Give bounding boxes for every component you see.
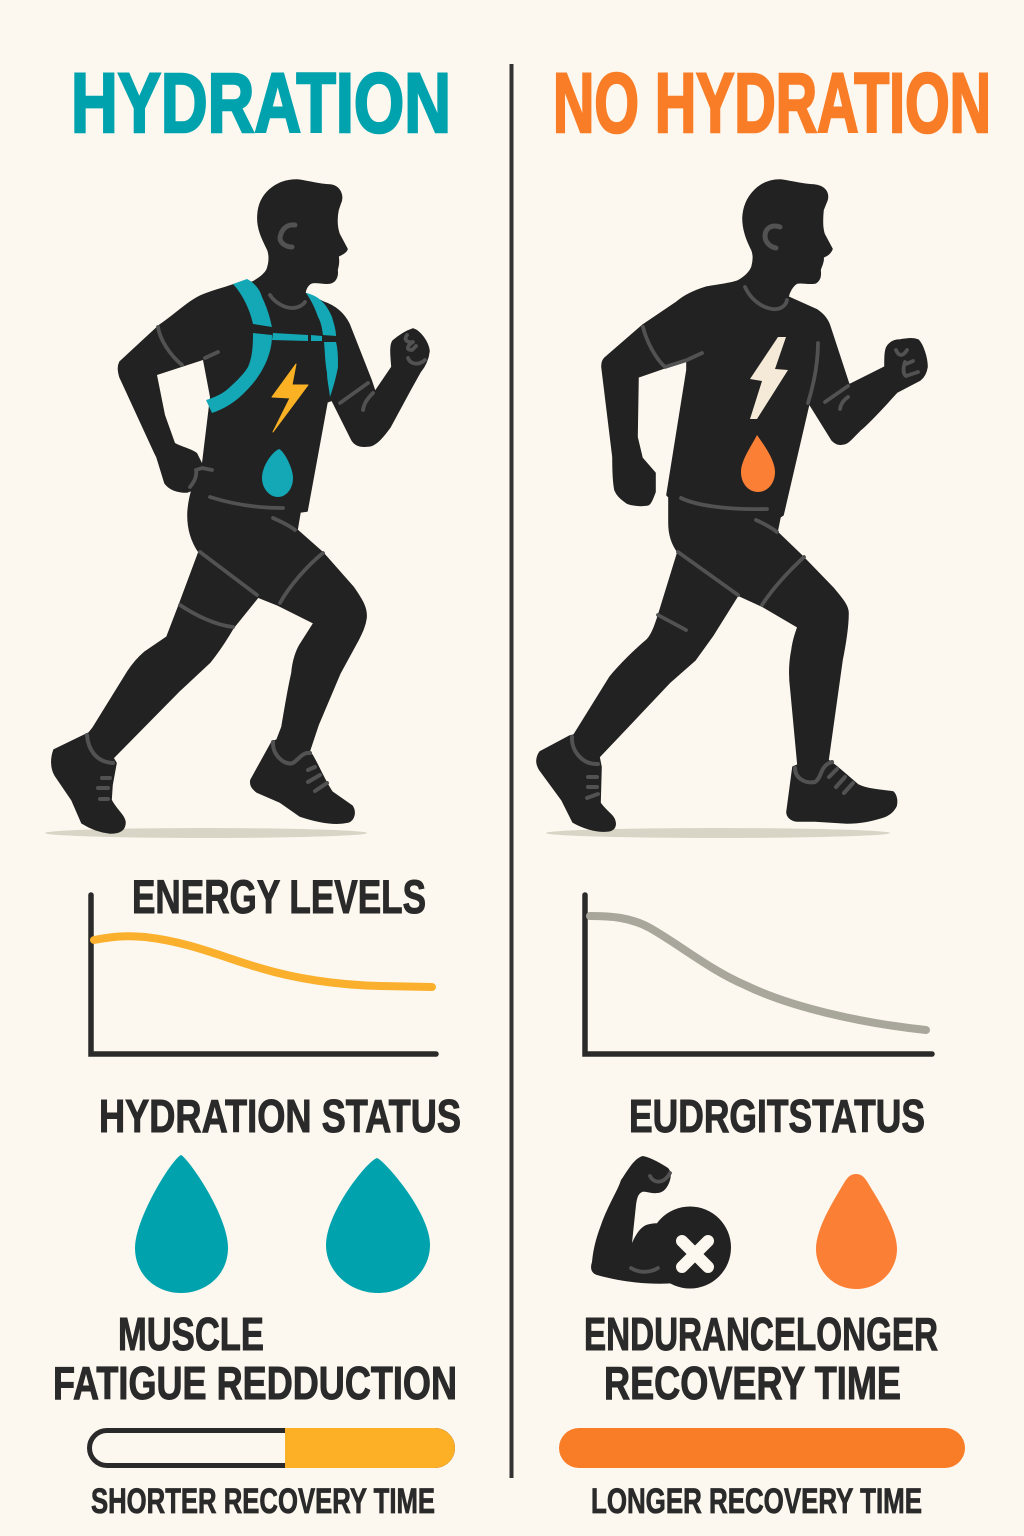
- hydration backpack straps: [206, 279, 338, 413]
- icon: pale lightning bolt: [750, 337, 788, 419]
- icon: orange drop: [816, 1174, 897, 1289]
- icon: teal water drop: [262, 449, 293, 497]
- clothing detail lines: [572, 226, 918, 798]
- ground shadow: [45, 828, 367, 838]
- heading: status: EUDRGITSTATUS: [629, 1090, 925, 1142]
- title: hydration: HYDRATION: [71, 56, 451, 150]
- caption: shorter recovery: SHORTER RECOVERY TIME: [91, 1482, 435, 1521]
- chart axes: [91, 895, 436, 1054]
- icon: orange water drop: [741, 435, 775, 492]
- energy line: [94, 936, 432, 987]
- energy decline chart: [585, 895, 932, 1054]
- runner silhouette: [52, 180, 429, 833]
- panel: hydration: [45, 56, 461, 1521]
- heading: energy levels: ENERGY LEVELS: [132, 870, 426, 923]
- ground shadow: [546, 828, 890, 838]
- icon: large water drop 1: [135, 1155, 228, 1293]
- icon: flexed muscle with x: [591, 1156, 731, 1288]
- arm gap: [157, 360, 210, 463]
- heading: endurance longer recovery time: [584, 1308, 938, 1409]
- recovery bar: [559, 1428, 965, 1468]
- runner without backpack: [537, 180, 927, 838]
- icon: yellow lightning bolt: [272, 364, 308, 432]
- energy levels chart: [91, 870, 436, 1054]
- heading: muscle fatigue: MUSCLE: [118, 1308, 264, 1360]
- heading: muscle fatigue: FATIGUE REDDUCTION: [53, 1357, 457, 1409]
- declining line: [590, 916, 926, 1030]
- icon: large water drop 2: [326, 1158, 430, 1293]
- heading: hydration status: HYDRATION STATUS: [99, 1090, 461, 1142]
- chart axes: [585, 895, 932, 1054]
- clothing detail lines: [87, 225, 425, 799]
- runner silhouette: [537, 180, 927, 831]
- heading: endurance longer recovery time: RECOVERY TIME: [604, 1357, 901, 1409]
- panel: no hydration: [537, 56, 991, 1521]
- recovery bar: [90, 1428, 455, 1468]
- runner with backpack: [45, 180, 429, 838]
- heading: muscle fatigue: [53, 1308, 457, 1409]
